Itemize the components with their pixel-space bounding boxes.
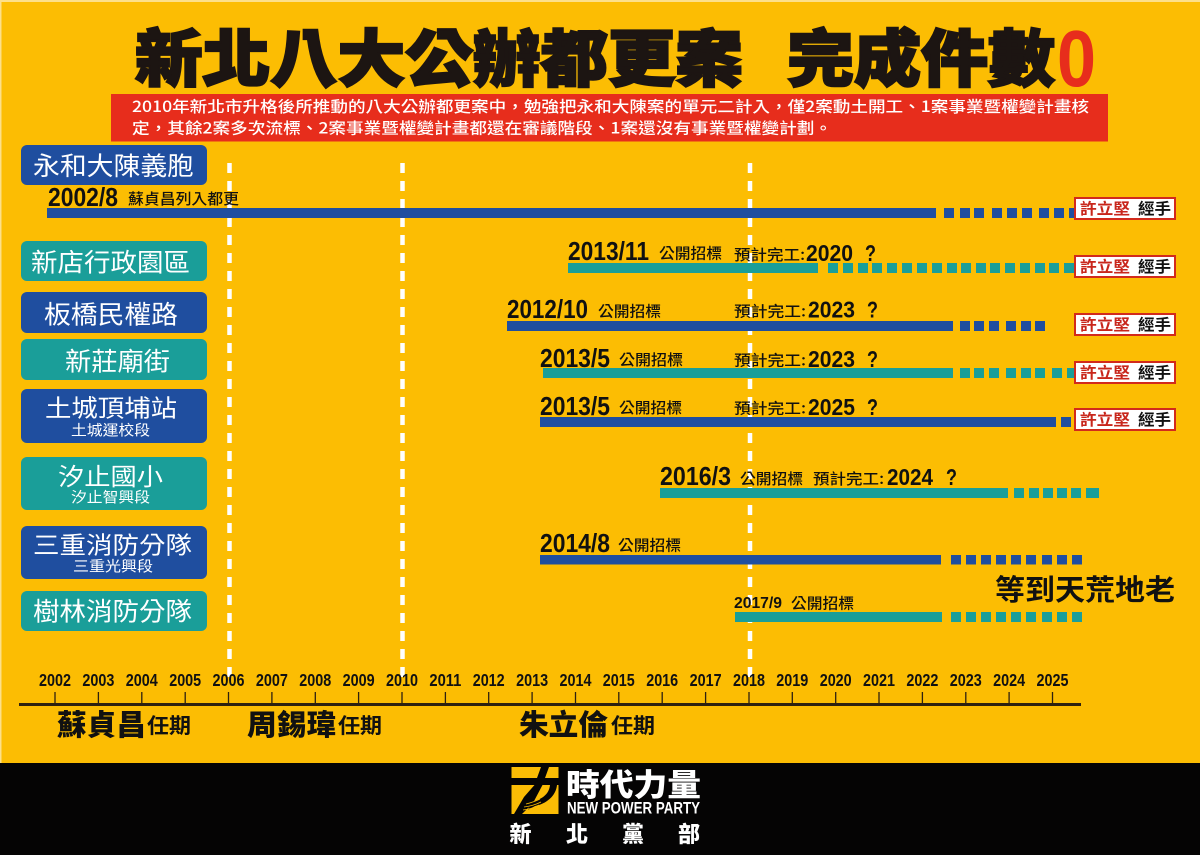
year axis: 2021 [863,670,895,690]
year axis: 2016 [646,670,678,690]
annotation: 等到天荒地老: 等到天荒地老 [995,567,1175,609]
timeline row: 汐止國小: 公開招標 [740,468,803,489]
title: 0 [1057,14,1096,103]
label: 新莊廟街 [21,339,207,380]
label: 永和大陳義胞: 永和大陳義胞 [33,146,194,183]
tenure: 周錫瑋: 周錫瑋 [247,702,336,744]
label: 三重消防分隊: 三重消防分隊 [33,526,192,560]
year axis: 2011 [429,670,462,690]
year axis: 2017 [690,670,722,690]
tag: 許立堅 經手 row 5: 許立堅 [1080,408,1130,430]
timeline row: 板橋民權路: 公開招標 [598,300,661,322]
timeline row: 板橋民權路: 2012/10 [507,294,588,324]
tenure: 蘇貞昌: 蘇貞昌 [57,702,146,744]
timeline row: 新店行政園區: 預計完工: [734,244,805,265]
branch name: 新北黨部: 新 [510,817,532,849]
timeline row: 永和大陳義胞: 2002/8 [48,182,118,212]
year axis: 2009 [343,670,375,690]
label: 土城頂埔站: 土城運校段 [71,420,150,440]
label: 新店行政園區: 新店行政園區 [31,242,190,280]
year axis: 2025 [1036,670,1069,690]
year axis: 2003 [82,670,115,690]
timeline row: 汐止國小: 2016/3 [660,461,731,491]
year axis: 2005 [169,670,201,690]
timeline row: 汐止國小: ? [946,464,957,490]
timeline row: 板橋民權路: 預計完工: [734,300,806,322]
year axis: 2012 [473,670,505,690]
tag: 許立堅 經手 row 4: 許立堅 [1080,361,1130,383]
tag: 許立堅 經手 row 5: 經手 [1138,408,1171,430]
branch name: 新北黨部 [510,817,700,849]
branch name: 新北黨部: 北 [566,817,588,849]
timeline row: 永和大陳義胞: 蘇貞昌列入都更 [128,188,239,209]
tag: 許立堅 經手 row 3 [1075,313,1175,335]
timeline row: 永和大陳義胞 [47,182,1075,218]
timeline row: 三重消防分隊: 公開招標 [618,534,681,556]
tag: 許立堅 經手 row 3: 經手 [1138,313,1171,335]
year axis: 2010 [386,670,418,690]
title [135,9,1096,103]
timeline row: 三重消防分隊 [540,528,1082,564]
timeline row: 樹林消防分隊 [734,592,1082,622]
timeline row: 土城頂埔站: 2013/5 [540,391,610,421]
timeline row: 汐止國小: 2024 [887,464,933,490]
timeline row: 板橋民權路 [507,294,1045,331]
summary callout [111,94,1108,142]
year axis: 2002 [39,670,71,690]
tenure: 周錫瑋 [247,702,382,744]
branch name: 新北黨部: 部 [678,817,700,849]
tag: 許立堅 經手 row 3: 許立堅 [1080,313,1130,335]
timeline row: 新莊廟街 [540,343,1074,378]
timeline row: 土城頂埔站: 預計完工: [734,398,806,418]
tenure: 朱立倫: 朱立倫 [519,702,608,744]
timeline row: 土城頂埔站 [540,391,1071,427]
tenure: 周錫瑋: 任期 [338,710,382,740]
year axis: 2008 [299,670,332,690]
timeline row: 土城頂埔站: ? [867,394,878,420]
tag: 許立堅 經手 row 1: 許立堅 [1080,197,1130,219]
label: 三重消防分隊 [21,526,207,579]
timeline row: 汐止國小 [660,461,1099,498]
tag: 許立堅 經手 row 5 [1075,408,1175,430]
timeline row: 新莊廟街: ? [867,346,878,372]
year axis: 2015 [603,670,635,690]
logo: New Power Party [512,767,558,814]
party name: 時代力量 [566,760,701,805]
tenure: 蘇貞昌: 任期 [147,710,191,740]
timeline row: 新店行政園區: ? [865,240,876,266]
label: 樹林消防分隊: 樹林消防分隊 [33,592,192,628]
timeline row: 土城頂埔站: 2025 [808,394,855,420]
title: 完成件數 [787,9,1055,99]
dashed marker lines: 2006, 2010, 2018 [230,163,750,682]
timeline row: 土城頂埔站: 公開招標 [619,397,682,418]
tag: 許立堅 經手 row 2 [1075,255,1175,277]
branch name: 新北黨部: 黨 [622,817,644,849]
year axis: 2024 [993,670,1025,690]
tag: 許立堅 經手 row 4 [1075,361,1175,383]
timeline row: 新店行政園區: 2013/11 [568,236,649,266]
timeline row: 新店行政園區: 公開招標 [659,242,722,264]
label: 土城頂埔站: 土城頂埔站 [45,388,177,424]
label: 汐止國小: 汐止國小 [58,457,163,492]
label: 汐止國小 [21,457,207,510]
tenure: 朱立倫 [519,702,655,744]
label: 板橋民權路: 板橋民權路 [44,294,178,332]
timeline row: 新莊廟街: 2013/5 [540,343,610,373]
tag: 許立堅 經手 row 2: 許立堅 [1080,255,1130,277]
timeline row: 新店行政園區 [568,236,1074,273]
year axis: 2004 [126,670,158,690]
timeline row: 板橋民權路: 2023 [808,296,855,322]
year axis: 2019 [776,670,809,690]
timeline row: 樹林消防分隊: 2017/9 [734,595,782,612]
summary callout: 2010年新北市升格後所推動的八大公辦都更案中，勉強把永和大陳案的單元二計入，僅2案動土開工、1案事業暨權變計畫核 [132,95,1090,117]
year axis [19,670,1081,706]
tag: 許立堅 經手 row 2: 經手 [1138,255,1171,277]
title: 新北八大公辦都更案 [135,9,743,99]
timeline row: 三重消防分隊: 2014/8 [540,528,610,558]
year axis: 2022 [906,670,939,690]
year axis: 2023 [950,670,982,690]
label: 汐止國小: 汐止智興段 [71,486,150,508]
year axis: 2013 [516,670,548,690]
timeline row: 新莊廟街: 公開招標 [619,349,683,370]
tag: 許立堅 經手 row 1: 經手 [1138,197,1171,219]
year axis: 2007 [256,670,288,690]
year axis: 2006 [212,670,245,690]
party name: NEW POWER PARTY [567,800,700,818]
label: 土城頂埔站 [21,388,207,443]
tag: 許立堅 經手 row 4: 經手 [1138,361,1171,383]
label: 三重消防分隊: 三重光興段 [73,556,153,576]
footer band [0,760,1200,855]
tag: 許立堅 經手 row 1 [1075,197,1175,219]
timeline row: 板橋民權路: ? [867,296,878,322]
tenure: 蘇貞昌 [57,702,191,744]
timeline row: 樹林消防分隊: 公開招標 [791,592,854,614]
label: 板橋民權路 [21,292,207,333]
year axis: 2018 [733,670,765,690]
tenure: 朱立倫: 任期 [611,710,655,740]
timeline row: 新店行政園區: 2020 [806,240,853,266]
summary callout: 定，其餘2案多次流標、2案事業暨權變計畫都還在審議階段、1案還沒有事業暨權變計劃。 [132,116,832,138]
timeline row: 新莊廟街: 預計完工: [734,350,806,370]
year axis: 2014 [560,670,592,690]
year axis: 2020 [820,670,852,690]
timeline row: 汐止國小: 預計完工: [813,468,884,489]
label: 新莊廟街: 新莊廟街 [65,342,170,378]
timeline row: 新莊廟街: 2023 [808,346,855,372]
